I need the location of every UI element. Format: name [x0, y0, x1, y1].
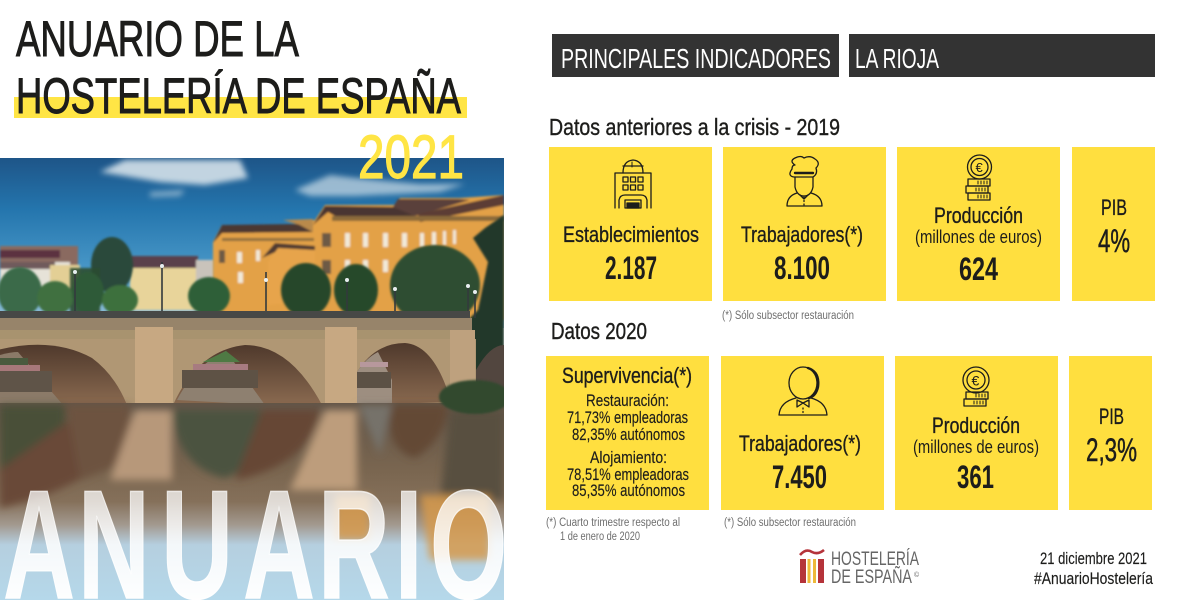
header: La Rioja: LA RIOJA — [855, 43, 939, 74]
footnote supervivencia — [546, 517, 680, 543]
header: principales indicadores — [552, 34, 839, 77]
photo: Puente de Piedra, Logroño — [0, 158, 511, 600]
value: 8.100 — [774, 250, 830, 286]
year 2021: 2021 — [358, 123, 464, 191]
value: 7.450 — [772, 459, 827, 495]
yellow highlight — [14, 97, 467, 118]
footnote supervivencia: 1 de enero de 2020 — [560, 531, 640, 543]
value: 4% — [1098, 223, 1130, 259]
section heading 2019: Datos anteriores a la crisis - 2019 — [549, 114, 840, 140]
title — [14, 11, 467, 124]
title line 2: HOSTELERÍA DE ESPAÑA — [16, 68, 461, 124]
label: PIB — [1099, 404, 1124, 429]
alojamiento figures: 78,51% empleadoras — [567, 466, 689, 484]
title line 1: ANUARIO DE LA — [16, 11, 299, 67]
arch 1 — [0, 345, 127, 405]
clouds — [100, 160, 465, 197]
logo: Hostelería de España: © — [914, 571, 920, 579]
panel: PIB 2019 — [1072, 147, 1155, 301]
panel: establecimientos 2019 — [549, 147, 712, 301]
value: 2.187 — [605, 250, 657, 286]
lamp posts — [73, 262, 477, 318]
label: Producción — [934, 203, 1023, 228]
panel: supervivencia 2020 — [546, 356, 709, 510]
panel: producción 2019 — [897, 147, 1060, 301]
value: 2,3% — [1086, 432, 1137, 468]
icon: coins — [963, 367, 989, 406]
panel: trabajadores 2020 — [721, 356, 884, 510]
sublabel: (millones de euros) — [913, 437, 1039, 457]
alojamiento figures: 85,35% autónomos — [572, 482, 685, 500]
icon: coins: € — [976, 160, 984, 175]
logo: Hostelería de España: DE ESPAÑA — [831, 566, 912, 588]
label: Producción — [932, 413, 1020, 438]
label: Trabajadores(*) — [741, 222, 863, 247]
label: Supervivencia(*) — [562, 363, 692, 388]
sky — [0, 158, 504, 328]
label: Establecimientos — [563, 222, 699, 247]
panel: producción 2020 — [895, 356, 1058, 510]
hashtag: #AnuarioHostelería — [1034, 570, 1154, 588]
footnote trabajadores 2020: (*) Sólo subsector restauración — [724, 517, 856, 529]
arch 2 — [173, 345, 322, 405]
header: La Rioja — [849, 34, 1155, 77]
restauración figures: Restauración: — [586, 392, 669, 410]
big orange building — [213, 195, 504, 320]
icon: coins — [966, 155, 992, 200]
restauración figures: 82,35% autónomos — [572, 426, 685, 444]
section heading 2020: Datos 2020 — [551, 318, 647, 344]
bridge — [0, 311, 504, 405]
label: PIB — [1101, 195, 1127, 220]
arch 3 — [357, 343, 448, 405]
sublabel: (millones de euros) — [915, 227, 1042, 247]
value: 624 — [959, 251, 998, 287]
panel: PIB 2020 — [1069, 356, 1152, 510]
trees — [0, 215, 504, 385]
riverside bush — [439, 380, 511, 414]
icon: coins: € — [972, 372, 980, 388]
river water — [0, 403, 504, 600]
icon: waiter — [779, 367, 827, 415]
logo text: HOSTELERÍA — [831, 549, 919, 570]
logo: Hostelería de España — [800, 549, 920, 588]
alojamiento figures: Alojamiento: — [590, 449, 667, 467]
reflections in the water — [0, 405, 504, 560]
value: 361 — [957, 459, 994, 495]
alojamiento figures — [567, 449, 689, 500]
logo mark — [800, 550, 824, 583]
header: principales indicadores: PRINCIPALES INDICADORES — [561, 43, 831, 74]
label: Trabajadores(*) — [739, 431, 861, 456]
left town buildings — [0, 246, 214, 310]
footnote 2019: (*) Sólo subsector restauración — [722, 310, 854, 322]
restauración figures — [567, 392, 688, 444]
icon: chef — [787, 156, 822, 206]
icon: hotel — [615, 160, 651, 208]
footnote supervivencia: (*) Cuarto trimestre respecto al — [546, 517, 680, 529]
date: 21 diciembre 2021 — [1040, 550, 1147, 568]
panel: trabajadores 2019 — [723, 147, 886, 301]
restauración figures: 71,73% empleadoras — [567, 409, 688, 427]
